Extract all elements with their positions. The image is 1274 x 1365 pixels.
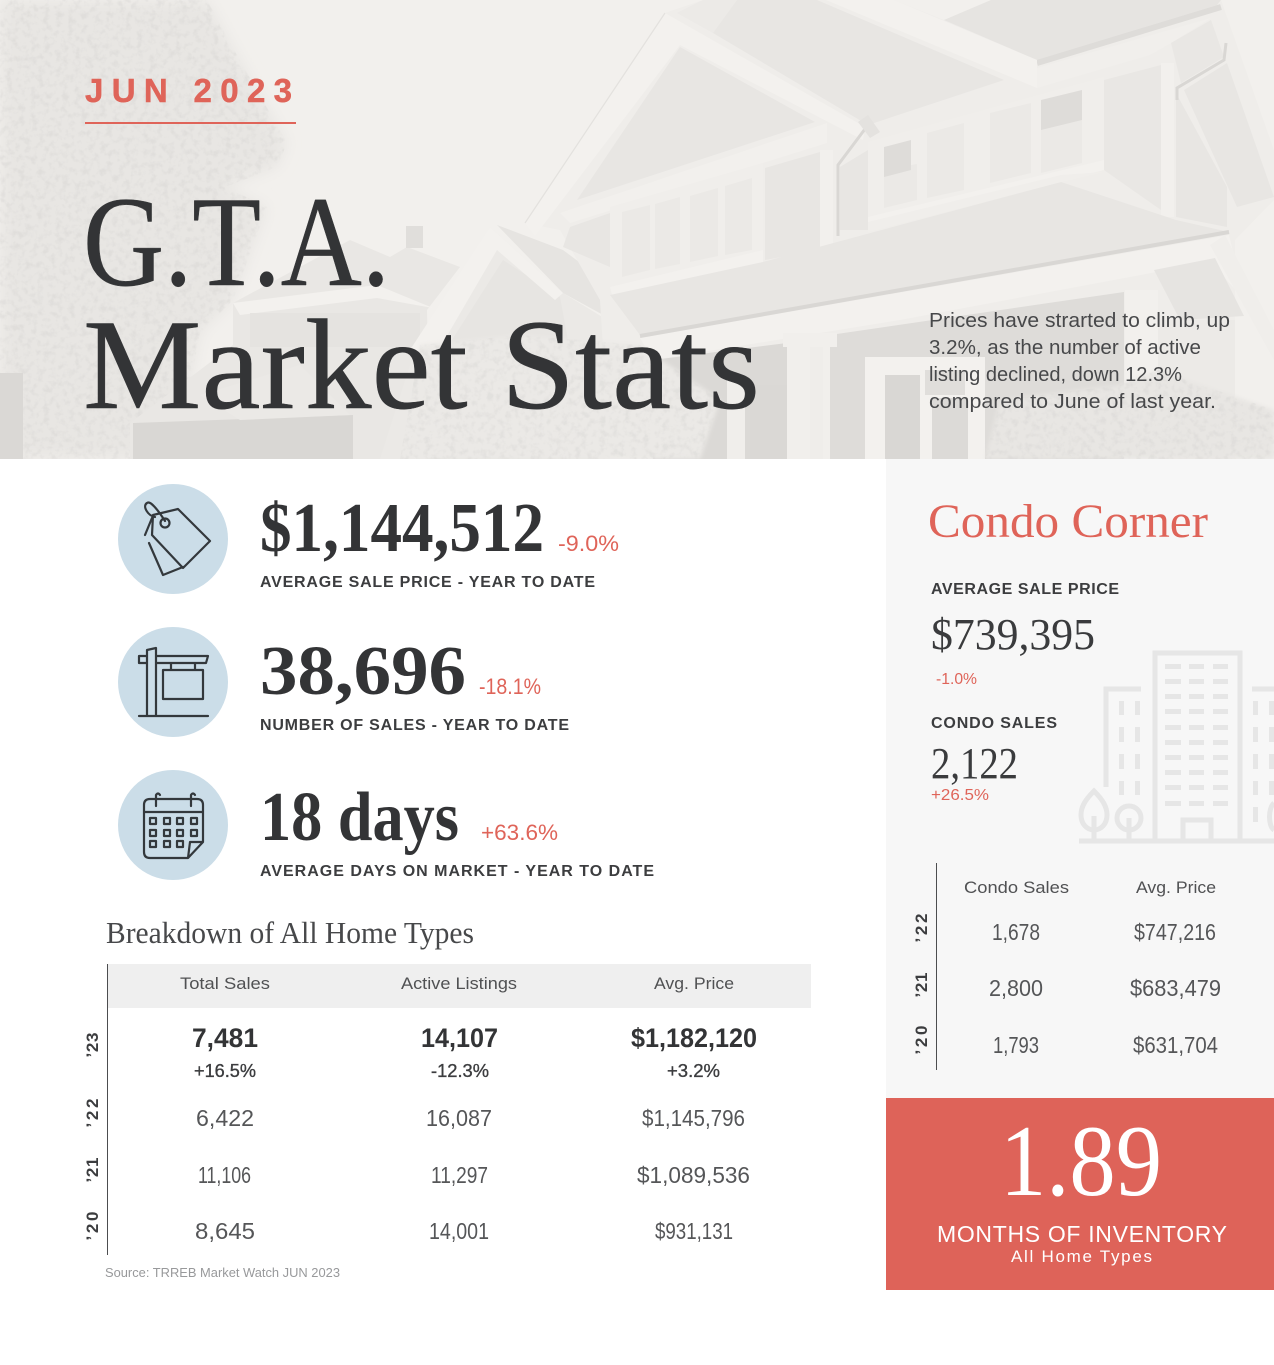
condo average price xyxy=(931,581,1119,688)
row 2021: 11,106 xyxy=(198,1162,251,1188)
stat: days on market: +63.6% xyxy=(481,820,558,845)
condo average price: $739,395 xyxy=(931,610,1095,659)
intro text xyxy=(929,310,1230,413)
icon: condo buildings xyxy=(1079,653,1274,841)
panel: months of inventory: 1.89 xyxy=(1000,1105,1162,1218)
stat: days on market xyxy=(118,770,654,880)
month heading: JUN 2023 xyxy=(85,72,292,109)
intro text: 3.2%, as the number of active xyxy=(929,337,1201,359)
small front gable xyxy=(380,227,640,459)
row 2021: 11,297 xyxy=(431,1162,488,1188)
row 2023: $1,182,120 xyxy=(631,1023,757,1053)
right porch post and soffit xyxy=(1125,290,1158,459)
table: condo history: $683,479 xyxy=(1130,975,1221,1001)
table: condo history: $747,216 xyxy=(1134,919,1216,945)
icon: for sale sign xyxy=(118,627,228,737)
row 2020: $931,131 xyxy=(655,1218,733,1244)
row 2023: 14,107 xyxy=(421,1023,498,1053)
sky notch and right roof xyxy=(894,0,991,20)
row 2020: 14,001 xyxy=(429,1218,489,1244)
row 2022: 6,422 xyxy=(196,1105,254,1131)
row 2023 xyxy=(83,1023,757,1081)
table header: Avg. Price xyxy=(654,974,734,993)
condo sales: 2,122 xyxy=(931,739,1018,788)
condo sales xyxy=(931,715,1057,804)
table: condo history: $631,704 xyxy=(1133,1032,1218,1058)
row 2021: $1,089,536 xyxy=(637,1162,750,1188)
trim band of upper gable xyxy=(1036,60,1037,62)
table: condo history: 1,793 xyxy=(993,1032,1039,1058)
condo average price: -1.0% xyxy=(936,671,977,688)
fascia and soffits on right xyxy=(1037,18,1211,88)
lower dormer xyxy=(560,123,827,223)
stat: number of sales xyxy=(118,627,569,737)
main house body xyxy=(578,262,638,334)
panel: condo corner xyxy=(886,459,1274,1098)
condo sales: CONDO SALES xyxy=(931,715,1057,732)
table header: Total Sales xyxy=(180,974,270,993)
title xyxy=(83,170,760,436)
table: all home types xyxy=(83,964,811,1255)
foreground shrubs xyxy=(653,360,717,459)
source note: Source: TRREB Market Watch JUN 2023 xyxy=(105,1265,340,1280)
porch interior xyxy=(830,292,1124,459)
row 2023: -12.3% xyxy=(431,1061,489,1081)
panel: months of inventory xyxy=(886,1098,1274,1290)
table: condo history: ’22 xyxy=(912,914,931,942)
table header xyxy=(180,974,734,993)
condo average price: AVERAGE SALE PRICE xyxy=(931,581,1119,598)
table: condo history xyxy=(912,863,1221,1070)
intro text: Prices have strarted to climb, up xyxy=(929,310,1230,332)
porch fascia xyxy=(640,235,1245,360)
row 2023: ’23 xyxy=(83,1032,102,1058)
table: condo history: 1,678 xyxy=(992,919,1040,945)
row 2022: 16,087 xyxy=(426,1105,492,1131)
row 2020 xyxy=(83,1212,733,1244)
stat: number of sales: 38,696 xyxy=(260,633,466,710)
stat: average sale price: -9.0% xyxy=(558,531,619,556)
stat: number of sales: -18.1% xyxy=(479,674,541,699)
table header: Active Listings xyxy=(401,974,517,993)
stat: average sale price xyxy=(118,484,619,594)
panel: months of inventory: All Home Types xyxy=(1011,1247,1152,1266)
stat: days on market: 18 days xyxy=(260,779,459,856)
title: Market Stats xyxy=(83,293,760,436)
porch posts xyxy=(787,337,810,459)
upper shingled wall xyxy=(713,0,1004,125)
table: condo history: Avg. Price xyxy=(1136,878,1216,897)
heading: breakdown: Breakdown of All Home Types xyxy=(106,915,474,950)
stat: average sale price: $1,144,512 xyxy=(260,490,544,567)
intro text: listing declined, down 12.3% xyxy=(929,364,1182,386)
icon: calendar xyxy=(118,770,228,880)
stat: days on market: AVERAGE DAYS ON MARKET - YEAR TO DATE xyxy=(260,863,654,880)
table: condo history: ’21 xyxy=(912,972,931,998)
panel: months of inventory: MONTHS OF INVENTORY xyxy=(937,1221,1227,1247)
lower main roof xyxy=(612,215,1166,295)
hero photo: faded house background xyxy=(0,0,1274,460)
icon: price tags xyxy=(118,484,228,594)
condo heading: Condo Corner xyxy=(928,495,1208,548)
row 2022: ’22 xyxy=(83,1098,102,1128)
row 2023: 7,481 xyxy=(192,1023,258,1053)
main gable trim xyxy=(525,13,865,236)
title: G.T.A. xyxy=(83,170,390,313)
row 2023: +3.2% xyxy=(667,1061,720,1081)
condo sales: +26.5% xyxy=(931,787,989,804)
upper dormer xyxy=(868,77,1104,225)
row 2022: $1,145,796 xyxy=(642,1105,745,1131)
row 2022 xyxy=(83,1098,745,1131)
row 2021 xyxy=(83,1158,750,1188)
table: condo history: Condo Sales xyxy=(964,878,1069,897)
side of second gable xyxy=(677,0,737,33)
stat: number of sales: NUMBER OF SALES - YEAR TO DATE xyxy=(260,717,569,734)
row 2020: ’20 xyxy=(83,1212,102,1240)
table: condo history: 2,800 xyxy=(989,975,1043,1001)
row 2021: ’21 xyxy=(83,1158,102,1182)
porch windows xyxy=(865,357,985,459)
row 2023: +16.5% xyxy=(194,1061,256,1081)
row 2020: 8,645 xyxy=(195,1218,255,1244)
main gable wall xyxy=(577,47,815,200)
table: condo history: ’20 xyxy=(912,1026,931,1054)
intro text: compared to June of last year. xyxy=(929,391,1216,413)
stat: average sale price: AVERAGE SALE PRICE - YEAR TO DATE xyxy=(260,574,595,591)
back house xyxy=(130,240,460,460)
